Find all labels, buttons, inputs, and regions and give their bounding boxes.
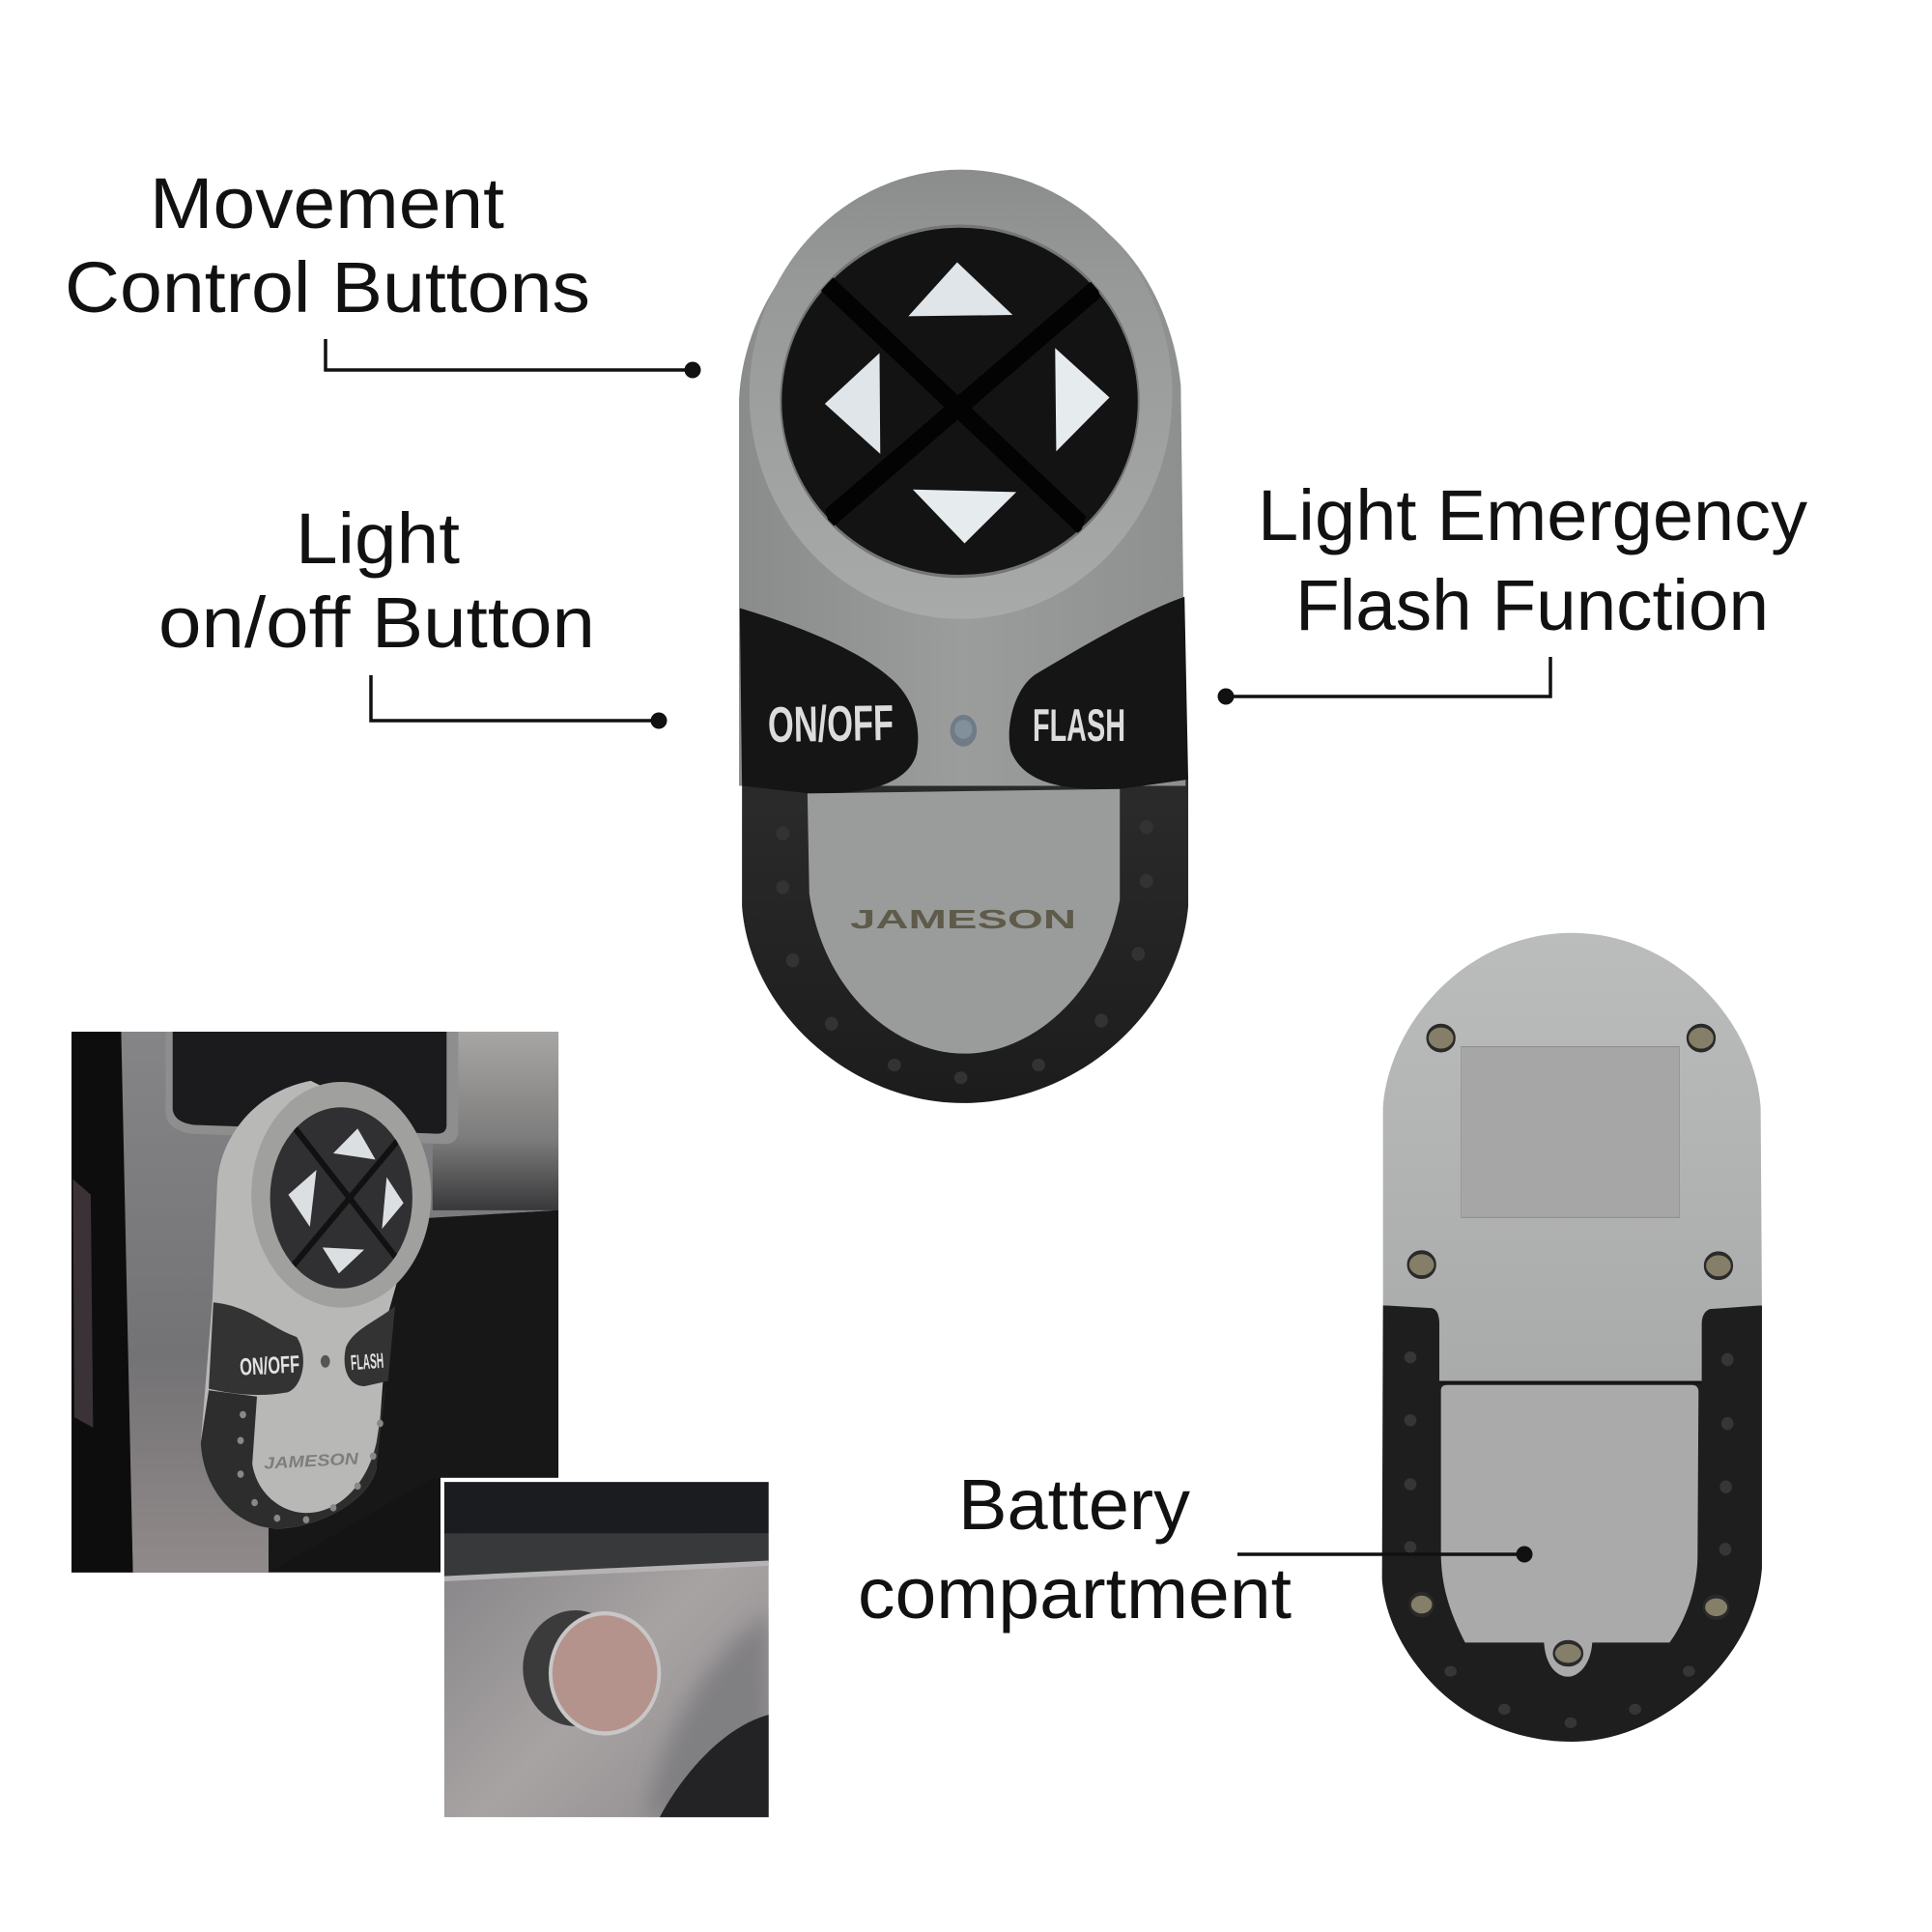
- rear upper grey shell: [1383, 933, 1762, 1382]
- highlight edge: [444, 1563, 769, 1578]
- label: battery compartment: [858, 1464, 1292, 1634]
- mounted remote dots: [238, 1411, 384, 1523]
- steel background: [444, 1482, 769, 1817]
- photo: magnet mount: [440, 1478, 773, 1822]
- photo text: on/off: ON/OFF: [239, 1350, 300, 1381]
- seam line: [1439, 1379, 1702, 1384]
- mounted remote body: [201, 1081, 400, 1528]
- arrow left: [825, 353, 880, 454]
- mounted remote disc: [270, 1107, 412, 1289]
- label plate: [1462, 1047, 1680, 1217]
- flash button text: FLASH: [1033, 699, 1125, 751]
- remote upper body: [739, 227, 1185, 785]
- photo text: brand: JAMESON: [264, 1449, 359, 1473]
- remote front view: [739, 170, 1188, 1103]
- mounted remote cross grooves: [290, 1127, 402, 1269]
- rear lower black shell: [1382, 1305, 1762, 1742]
- label: battery compartment: compartment: [858, 1553, 1292, 1634]
- button cross grooves: [824, 281, 1097, 526]
- screws: [1408, 1026, 1732, 1664]
- dark corner: [660, 1715, 769, 1817]
- window opening: [173, 1032, 446, 1134]
- magnet rim: [549, 1611, 661, 1736]
- mounted remote left band: [209, 1302, 303, 1395]
- arrow down: [913, 490, 1016, 544]
- lower grey tab: [808, 789, 1120, 1054]
- label: movement control buttons: Control Buttons: [65, 247, 590, 327]
- grip dots: [1405, 1351, 1734, 1728]
- magnet side: [523, 1610, 591, 1726]
- photo: remote mounted in vehicle: [71, 1032, 558, 1573]
- left black column: [71, 1032, 133, 1573]
- label: battery compartment: Battery: [958, 1464, 1190, 1545]
- remote back view: [1382, 933, 1762, 1742]
- photo white border: [440, 1478, 773, 1822]
- text: FLASH: [350, 1349, 384, 1375]
- on/off button text: ON/OFF: [768, 696, 894, 753]
- ledge: [444, 1534, 769, 1577]
- arrow up: [908, 263, 1012, 316]
- leader line: movement control buttons: [326, 339, 701, 379]
- mounted remote arrows: [288, 1128, 404, 1273]
- mounted remote ring: [251, 1082, 431, 1308]
- arrow right: [1055, 348, 1110, 451]
- lower right dark panel: [269, 1210, 558, 1573]
- button disc: [781, 226, 1139, 577]
- label: light emergency flash function: Light Emergency: [1258, 475, 1807, 555]
- leader line: battery compartment: [1237, 1546, 1532, 1563]
- leader line: flash function: [1217, 657, 1550, 705]
- right black band: [1009, 597, 1188, 789]
- dark top recess: [444, 1482, 769, 1534]
- label: light on/off button: Light: [296, 498, 460, 579]
- label: light on/off button: [158, 498, 595, 663]
- magnet face: [553, 1615, 657, 1731]
- battery compartment cover: [1441, 1385, 1698, 1677]
- grip dots: [776, 820, 1153, 1084]
- right steel panel: [433, 1032, 558, 1210]
- label: light emergency flash function: [1258, 475, 1807, 645]
- remote lower grip: [742, 780, 1188, 1103]
- mounted remote lower grip: [201, 1383, 385, 1528]
- ring bezel: [750, 170, 1173, 619]
- label: movement control buttons: Movement: [150, 163, 504, 243]
- mounted remote right band: [345, 1306, 395, 1386]
- brand name: JAMESON: [850, 904, 1076, 934]
- label: light emergency flash function: Flash Function: [1295, 565, 1769, 645]
- leader line: light on/off button: [371, 675, 667, 728]
- label: light on/off button: on/off Button: [158, 582, 595, 663]
- left black band: [740, 609, 918, 794]
- indicator LED: [951, 715, 977, 747]
- darker steel swath: [645, 1614, 769, 1817]
- steel trim: [119, 1032, 558, 1573]
- mounted remote LED: [321, 1355, 330, 1368]
- label: movement control buttons: [65, 163, 590, 327]
- window frame highlight: [165, 1032, 458, 1144]
- dark background: [71, 1032, 558, 1573]
